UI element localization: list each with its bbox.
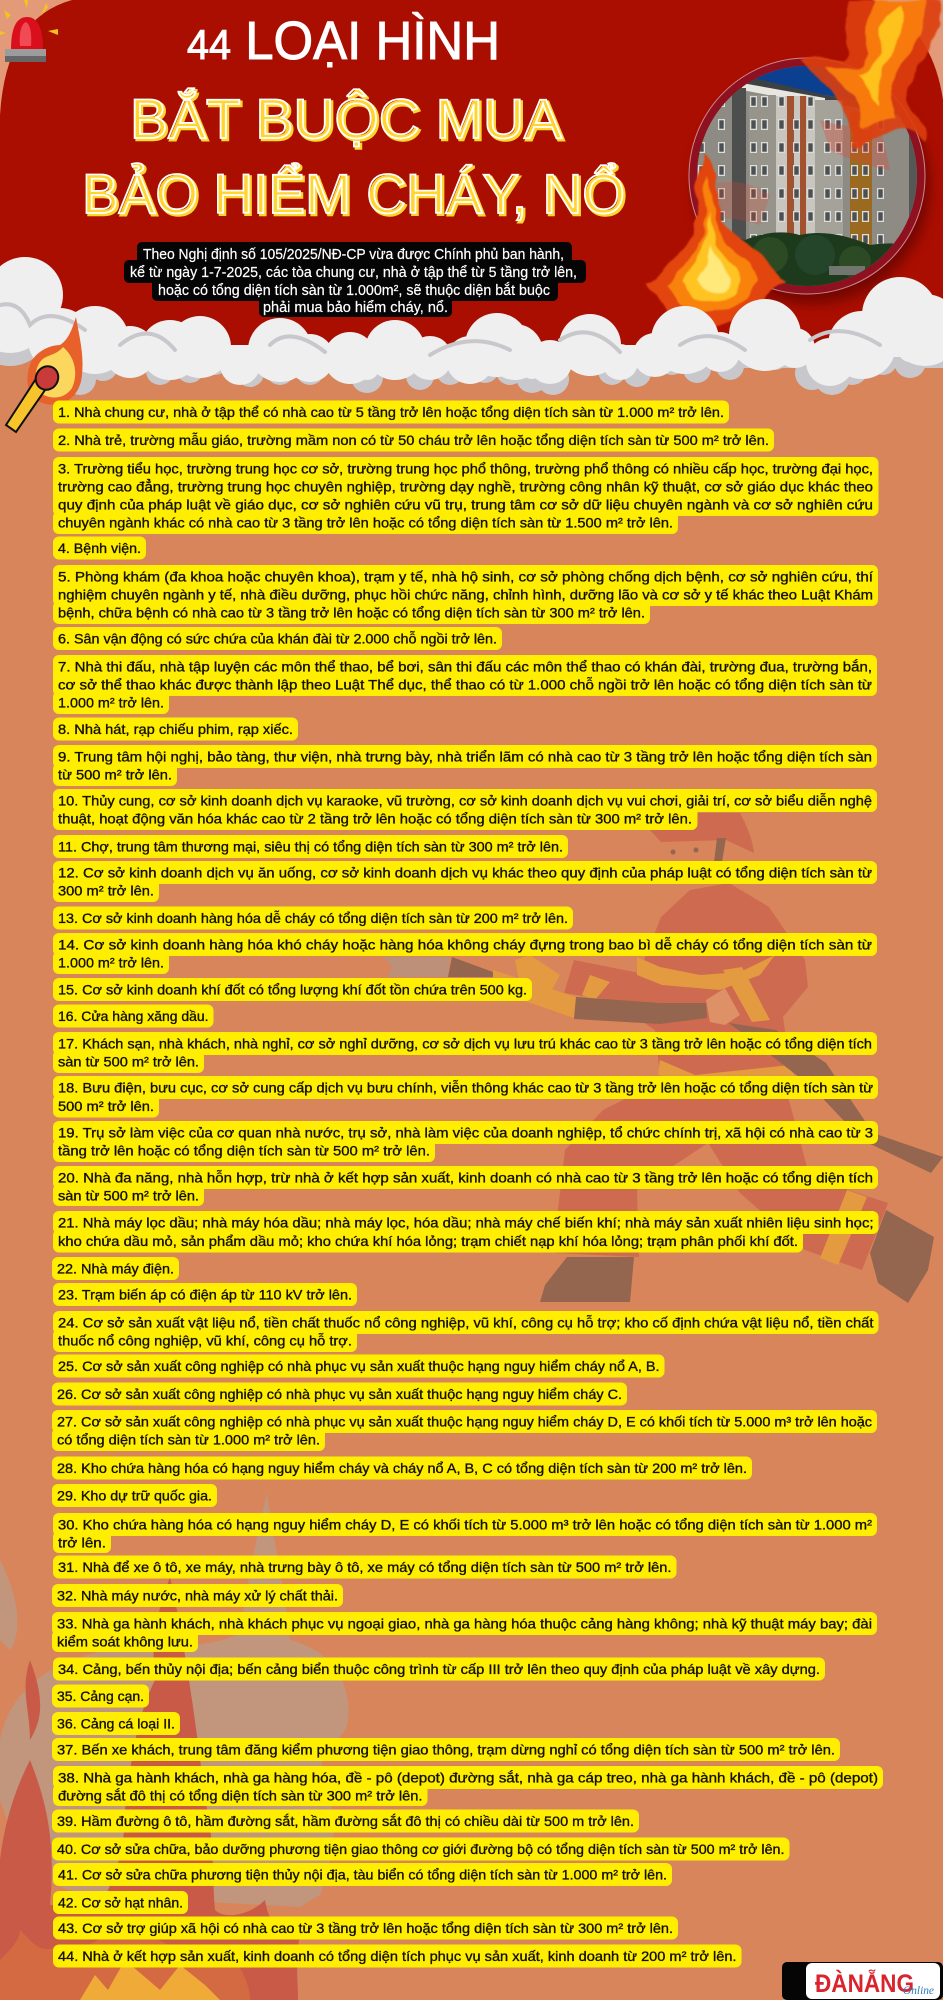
item 6: 6. Sân vận động có sức chứa của khán đài từ 2.000 chỗ ngồi trở lên.: [58, 630, 497, 646]
intro callout: kể từ ngày 1-7-2025, các tòa chung cư, nhà ở tập thể từ 5 tầng trở lên,: [130, 265, 577, 281]
item 44: 44. Nhà ở kết hợp sản xuất, kinh doanh có tổng diện tích phục vụ sản xuất, kinh doanh từ 200 m² trở lên.: [58, 1948, 736, 1964]
item 25: [53, 1354, 664, 1378]
top corners background: [0, 0, 943, 130]
illustration: firefighter watermark: [384, 813, 943, 1303]
item 42: 42. Cơ sở hạt nhân.: [58, 1894, 183, 1910]
item 16: 16. Cửa hàng xăng dầu.: [58, 1008, 208, 1024]
item 39: [52, 1810, 639, 1832]
item 7: 1.000 m² trở lên.: [58, 695, 164, 711]
item 31: 31. Nhà để xe ô tô, xe máy, nhà trưng bày ô tô, xe máy có tổng diện tích sàn từ 500 m² trở lên.: [58, 1559, 672, 1575]
title: bắt buộc mua: BẮT BUỘC MUA: [132, 89, 565, 152]
item 10: [53, 789, 877, 830]
item 43: 43. Cơ sở trợ giúp xã hội có nhà cao từ 3 tầng trở lên hoặc tổng diện tích sàn từ 300 m² trở lên.: [58, 1920, 673, 1936]
item 8: 8. Nhà hát, rạp chiếu phim, rạp xiếc.: [58, 721, 293, 737]
item 36: [52, 1712, 180, 1735]
item 10: thuật, hoạt động văn hóa khác cao từ 2 tầng trở lên hoặc có tổng diện tích sàn từ 300 m² trở lên.: [58, 811, 692, 827]
item 30: 30. Kho chứa hàng hóa có hạng nguy hiểm cháy D, E có khối tích từ 5.000 m³ trở lên hoặc có tổng diện tích sàn từ 1.000 m²: [58, 1516, 872, 1532]
item 7: [53, 655, 877, 714]
item 12: [53, 861, 877, 902]
intro callout: [124, 242, 586, 317]
item 40: 40. Cơ sở sửa chữa, bảo dưỡng phương tiện giao thông cơ giới đường bộ có tổng diện tích sàn từ 500 m² trở lên.: [57, 1841, 784, 1857]
icon: alarm siren: [0, 0, 58, 62]
item 40: [52, 1838, 790, 1860]
item 9: 9. Trung tâm hội nghị, bảo tàng, thư viện, nhà trưng bày, nhà triển lãm có nhà cao từ 3 tầng trở lên hoặc tổng diện tích sàn: [58, 749, 872, 765]
item 6: [53, 627, 502, 650]
item 5: nghiệm chuyên ngành y tế, nhà điều dưỡng, phục hồi chức năng, chỉnh hình, dưỡng lão và cơ sở y tế khác theo Luật Khám: [58, 587, 873, 603]
title: 44 loại hình: 44 LOẠI HÌNH: [187, 11, 500, 71]
item 7: 7. Nhà thi đấu, nhà tập luyện các môn thể thao, bể bơi, sân thi đấu các môn thể thao có khán đài, trường đua, trường bắn,: [58, 659, 872, 675]
list of 44 facility types: [52, 400, 883, 1968]
item 25: 25. Cơ sở sản xuất công nghiệp có nhà phục vụ sản xuất thuộc hạng nguy hiểm cháy nổ A, B.: [58, 1358, 660, 1374]
item 22: [52, 1257, 179, 1280]
item 3: 3. Trường tiểu học, trường trung học cơ sở, trường trung học phổ thông, trường phổ thông có nhiều cấp học, trường đại học,: [58, 461, 873, 477]
header panel: [0, 0, 943, 350]
item 36: 36. Cảng cá loại II.: [57, 1715, 175, 1731]
item 20: sàn từ 500 m² trở lên.: [58, 1187, 199, 1203]
item 42: [53, 1891, 188, 1914]
logo: Đà Nẵng Online: [782, 1962, 943, 2000]
item 29: [52, 1484, 217, 1507]
item 34: [53, 1658, 825, 1680]
item 8: [53, 718, 298, 740]
item 26: 26. Cơ sở sản xuất công nghiệp có nhà phục vụ sản xuất thuộc hạng nguy hiểm cháy C.: [57, 1386, 622, 1402]
item 14: [53, 933, 877, 974]
item 38: 38. Nhà ga hành khách, nhà ga hàng hóa, đề - pô (depot) đường sắt, nhà ga cáp treo, nhà ga hành khách, đề - pô (depot): [58, 1769, 878, 1785]
item 5: 5. Phòng khám (đa khoa hoặc chuyên khoa), trạm y tế, nhà hộ sinh, cơ sở phòng chống dịch bệnh, cơ sở nghiên cứu, thí: [58, 569, 873, 585]
item 21: 21. Nhà máy lọc dầu; nhà máy hóa dầu; nhà máy lọc, hóa dầu; nhà máy chế biến khí; nhà máy sản xuất nhiên liệu sinh học;: [58, 1214, 874, 1230]
item 14: 1.000 m² trở lên.: [58, 955, 164, 971]
item 13: 13. Cơ sở kinh doanh hàng hóa dễ cháy có tổng diện tích sàn từ 200 m² trở lên.: [58, 910, 568, 926]
item 35: 35. Cảng cạn.: [57, 1688, 144, 1704]
item 27: [52, 1410, 877, 1451]
item 37: 37. Bến xe khách, trung tâm đăng kiểm phương tiện giao thông, trạm dừng nghỉ có tổng diện tích sàn từ 500 m² trở lên.: [57, 1742, 835, 1758]
item 38: [53, 1766, 883, 1806]
item 23: 23. Trạm biến áp có điện áp từ 110 kV trở lên.: [58, 1286, 352, 1302]
item 24: thuốc nổ công nghiệp, vũ khí, công cụ hỗ trợ.: [58, 1332, 352, 1348]
item 1: [53, 400, 729, 424]
title: bắt buộc mua: BẮT BUỘC MUA: [130, 87, 563, 150]
item 19: tầng trở lên hoặc có tổng diện tích sàn từ 500 m² trở lên.: [58, 1143, 430, 1159]
item 15: [53, 978, 532, 1001]
item 43: [53, 1916, 678, 1940]
item 38: đường sắt đô thị có tổng diện tích sàn từ 300 m² trở lên.: [58, 1787, 422, 1803]
item 20: 20. Nhà đa năng, nhà hỗn hợp, trừ nhà ở kết hợp sản xuất, kinh doanh có nhà cao từ 3 tầng trở lên hoặc có tổng diện tích: [58, 1169, 873, 1185]
item 26: [52, 1382, 627, 1406]
item 3: chuyên ngành khác có nhà cao từ 3 tầng trở lên hoặc có tổng diện tích sàn từ 1.500 m² trở lên.: [58, 515, 673, 531]
item 13: [53, 906, 573, 930]
item 16: [53, 1004, 214, 1028]
item 12: 300 m² trở lên.: [58, 883, 154, 899]
item 18: 18. Bưu điện, bưu cục, cơ sở cung cấp dịch vụ bưu chính, viễn thông khác cao từ 3 tầng trở lên hoặc có tổng diện tích sàn từ: [58, 1080, 873, 1096]
item 23: [53, 1283, 357, 1306]
item 19: 19. Trụ sở làm việc của cơ quan nhà nước, trụ sở, nhà làm việc của doanh nghiệp, tổ chức chính trị, xã hội có nhà cao từ 3: [58, 1125, 873, 1141]
item 30: [53, 1513, 877, 1553]
item 34: 34. Cảng, bến thủy nội địa; bến cảng biển thuộc công trình từ cấp III trở lên theo quy định của pháp luật về xây dựng.: [58, 1661, 820, 1677]
flame: lower left of photo: [647, 153, 787, 329]
item 33: kiểm soát không lưu.: [57, 1633, 193, 1649]
item 27: 27. Cơ sở sản xuất công nghiệp có nhà phục vụ sản xuất thuộc hạng nguy hiểm cháy D, E có khối tích từ 5.000 m³ trở lên hoặc: [57, 1413, 872, 1429]
item 17: 17. Khách sạn, nhà khách, nhà nghỉ, cơ sở nghỉ dưỡng, cơ sở dịch vụ lưu trú khác cao từ 3 tầng trở lên hoặc có tổng diện tích: [58, 1035, 872, 1051]
item 21: [53, 1211, 878, 1252]
title: bảo hiểm cháy nổ: BẢO HIỂM CHÁY, NỔ: [84, 164, 627, 227]
item 29: 29. Kho dự trữ quốc gia.: [57, 1487, 212, 1503]
item 2: [53, 428, 774, 452]
item 33: [52, 1612, 877, 1652]
item 2: 2. Nhà trẻ, trường mẫu giáo, trường mầm non có từ 50 cháu trở lên hoặc tổng diện tích sàn từ 500 m² trở lên.: [58, 432, 769, 448]
item 3: quy định của pháp luật về giáo dục, cơ sở nghiên cứu vũ trụ, trung tâm cơ sở dữ liệu chuyên ngành và cơ sở nghiên cứu: [58, 497, 873, 513]
item 39: 39. Hầm đường ô tô, hầm đường sắt, hầm đường sắt đô thị có chiều dài từ 500 m trở lên.: [57, 1813, 634, 1829]
item 37: [52, 1738, 840, 1761]
intro callout: Theo Nghị định số 105/2025/NĐ-CP vừa được Chính phủ ban hành,: [143, 247, 564, 263]
item 28: [52, 1456, 752, 1480]
logo: Đà Nẵng Online: ĐÀNẴNG: [815, 1969, 914, 1998]
item 3: [53, 457, 878, 534]
item 14: 14. Cơ sở kinh doanh hàng hóa khó cháy hoặc hàng hóa không cháy đựng trong bao bì dễ cháy có tổng diện tích sàn từ: [58, 937, 872, 953]
item 17: [53, 1032, 877, 1073]
item 10: 10. Thủy cung, cơ sở kinh doanh dịch vụ karaoke, vũ trường, cơ sở kinh doanh dịch vụ vui chơi, giải trí, cơ sở biểu diễn nghệ: [58, 793, 872, 809]
item 5: bệnh, chữa bệnh có nhà cao từ 3 tầng trở lên hoặc có tổng diện tích sàn từ 300 m² trở lên.: [58, 605, 645, 621]
item 32: 32. Nhà máy nước, nhà máy xử lý chất thải.: [57, 1587, 338, 1603]
item 9: từ 500 m² trở lên.: [58, 767, 172, 783]
item 31: [53, 1556, 676, 1578]
item 41: [53, 1863, 672, 1886]
item 15: 15. Cơ sở kinh doanh khí đốt có tổng lượng khí đốt tồn chứa trên 500 kg.: [58, 981, 527, 997]
item 28: 28. Kho chứa hàng hóa có hạng nguy hiểm cháy và cháy nổ A, B, C có tổng diện tích sàn từ 200 m² trở lên.: [57, 1460, 747, 1476]
illustration: flames watermark bottom left: [0, 1493, 348, 2000]
item 41: 41. Cơ sở sửa chữa phương tiện thủy nội địa, tàu biển có tổng diện tích sàn từ 1.000 m² trở lên.: [58, 1866, 667, 1882]
item 32: [52, 1584, 343, 1607]
title: bảo hiểm cháy nổ: BẢO HIỂM CHÁY, NỔ: [82, 162, 625, 225]
item 24: [53, 1311, 878, 1352]
item 30: trở lên.: [58, 1534, 106, 1550]
intro callout: hoặc có tổng diện tích sàn từ 1.000m², sẽ thuộc diện bắt buộc: [158, 282, 550, 299]
item 17: sàn từ 500 m² trở lên.: [58, 1053, 199, 1069]
item 35: [52, 1684, 149, 1708]
icon: burning match: [6, 317, 83, 432]
item 33: 33. Nhà ga hành khách, nhà khách phục vụ ngoại giao, nhà ga hàng hóa thuộc cảng hàng không; nhà kỹ thuật máy bay; đài: [57, 1615, 872, 1631]
item 4: [53, 536, 146, 560]
photo: apartment building in circle: [689, 58, 930, 304]
flame: over photo top right: [800, 0, 940, 149]
item 24: 24. Cơ sở sản xuất vật liệu nổ, tiền chất thuốc nổ công nghiệp, vũ khí, công cụ hỗ trợ; kho cố định chứa vật liệu nổ, tiền chất: [58, 1314, 874, 1330]
item 7: cơ sở thể thao khác được thành lập theo Luật Thể dục, thể thao có từ 1.000 chỗ ngồi trở lên hoặc có tổng diện tích sàn từ: [58, 677, 872, 693]
logo: Đà Nẵng Online: Online: [903, 1983, 935, 1997]
item 5: [53, 565, 878, 624]
item 19: [53, 1121, 878, 1162]
item 18: 500 m² trở lên.: [58, 1098, 154, 1114]
intro callout: phải mua bảo hiểm cháy, nổ.: [263, 300, 448, 316]
item 21: kho chứa dầu mỏ, sản phẩm dầu mỏ; kho chứa khí hóa lỏng; trạm chiết nạp khí hóa lỏng; trạm phân phối khí đốt.: [58, 1233, 798, 1249]
item 9: [53, 745, 877, 786]
item 11: 11. Chợ, trung tâm thương mại, siêu thị có tổng diện tích sàn từ 300 m² trở lên.: [58, 838, 563, 854]
item 1: 1. Nhà chung cư, nhà ở tập thể có nhà cao từ 5 tầng trở lên hoặc tổng diện tích sàn từ 1.000 m² trở lên.: [58, 404, 724, 420]
smoke band: [0, 257, 943, 395]
item 27: có tổng diện tích sàn từ 1.000 m² trở lên.: [57, 1431, 320, 1447]
item 22: 22. Nhà máy điện.: [57, 1260, 174, 1276]
item 3: trường cao đẳng, trường trung học chuyên nghiệp, trường dạy nghề, trường công nhân kỹ thuật, cơ sở giáo dục khác theo: [58, 478, 873, 495]
item 18: [53, 1076, 878, 1118]
item 44: [53, 1944, 742, 1968]
item 12: 12. Cơ sở kinh doanh dịch vụ ăn uống, cơ sở kinh doanh dịch vụ khác theo quy định của pháp luật có tổng diện tích sàn từ: [58, 865, 872, 881]
item 4: 4. Bệnh viện.: [58, 540, 141, 556]
item 20: [53, 1166, 878, 1206]
item 11: [53, 835, 568, 858]
